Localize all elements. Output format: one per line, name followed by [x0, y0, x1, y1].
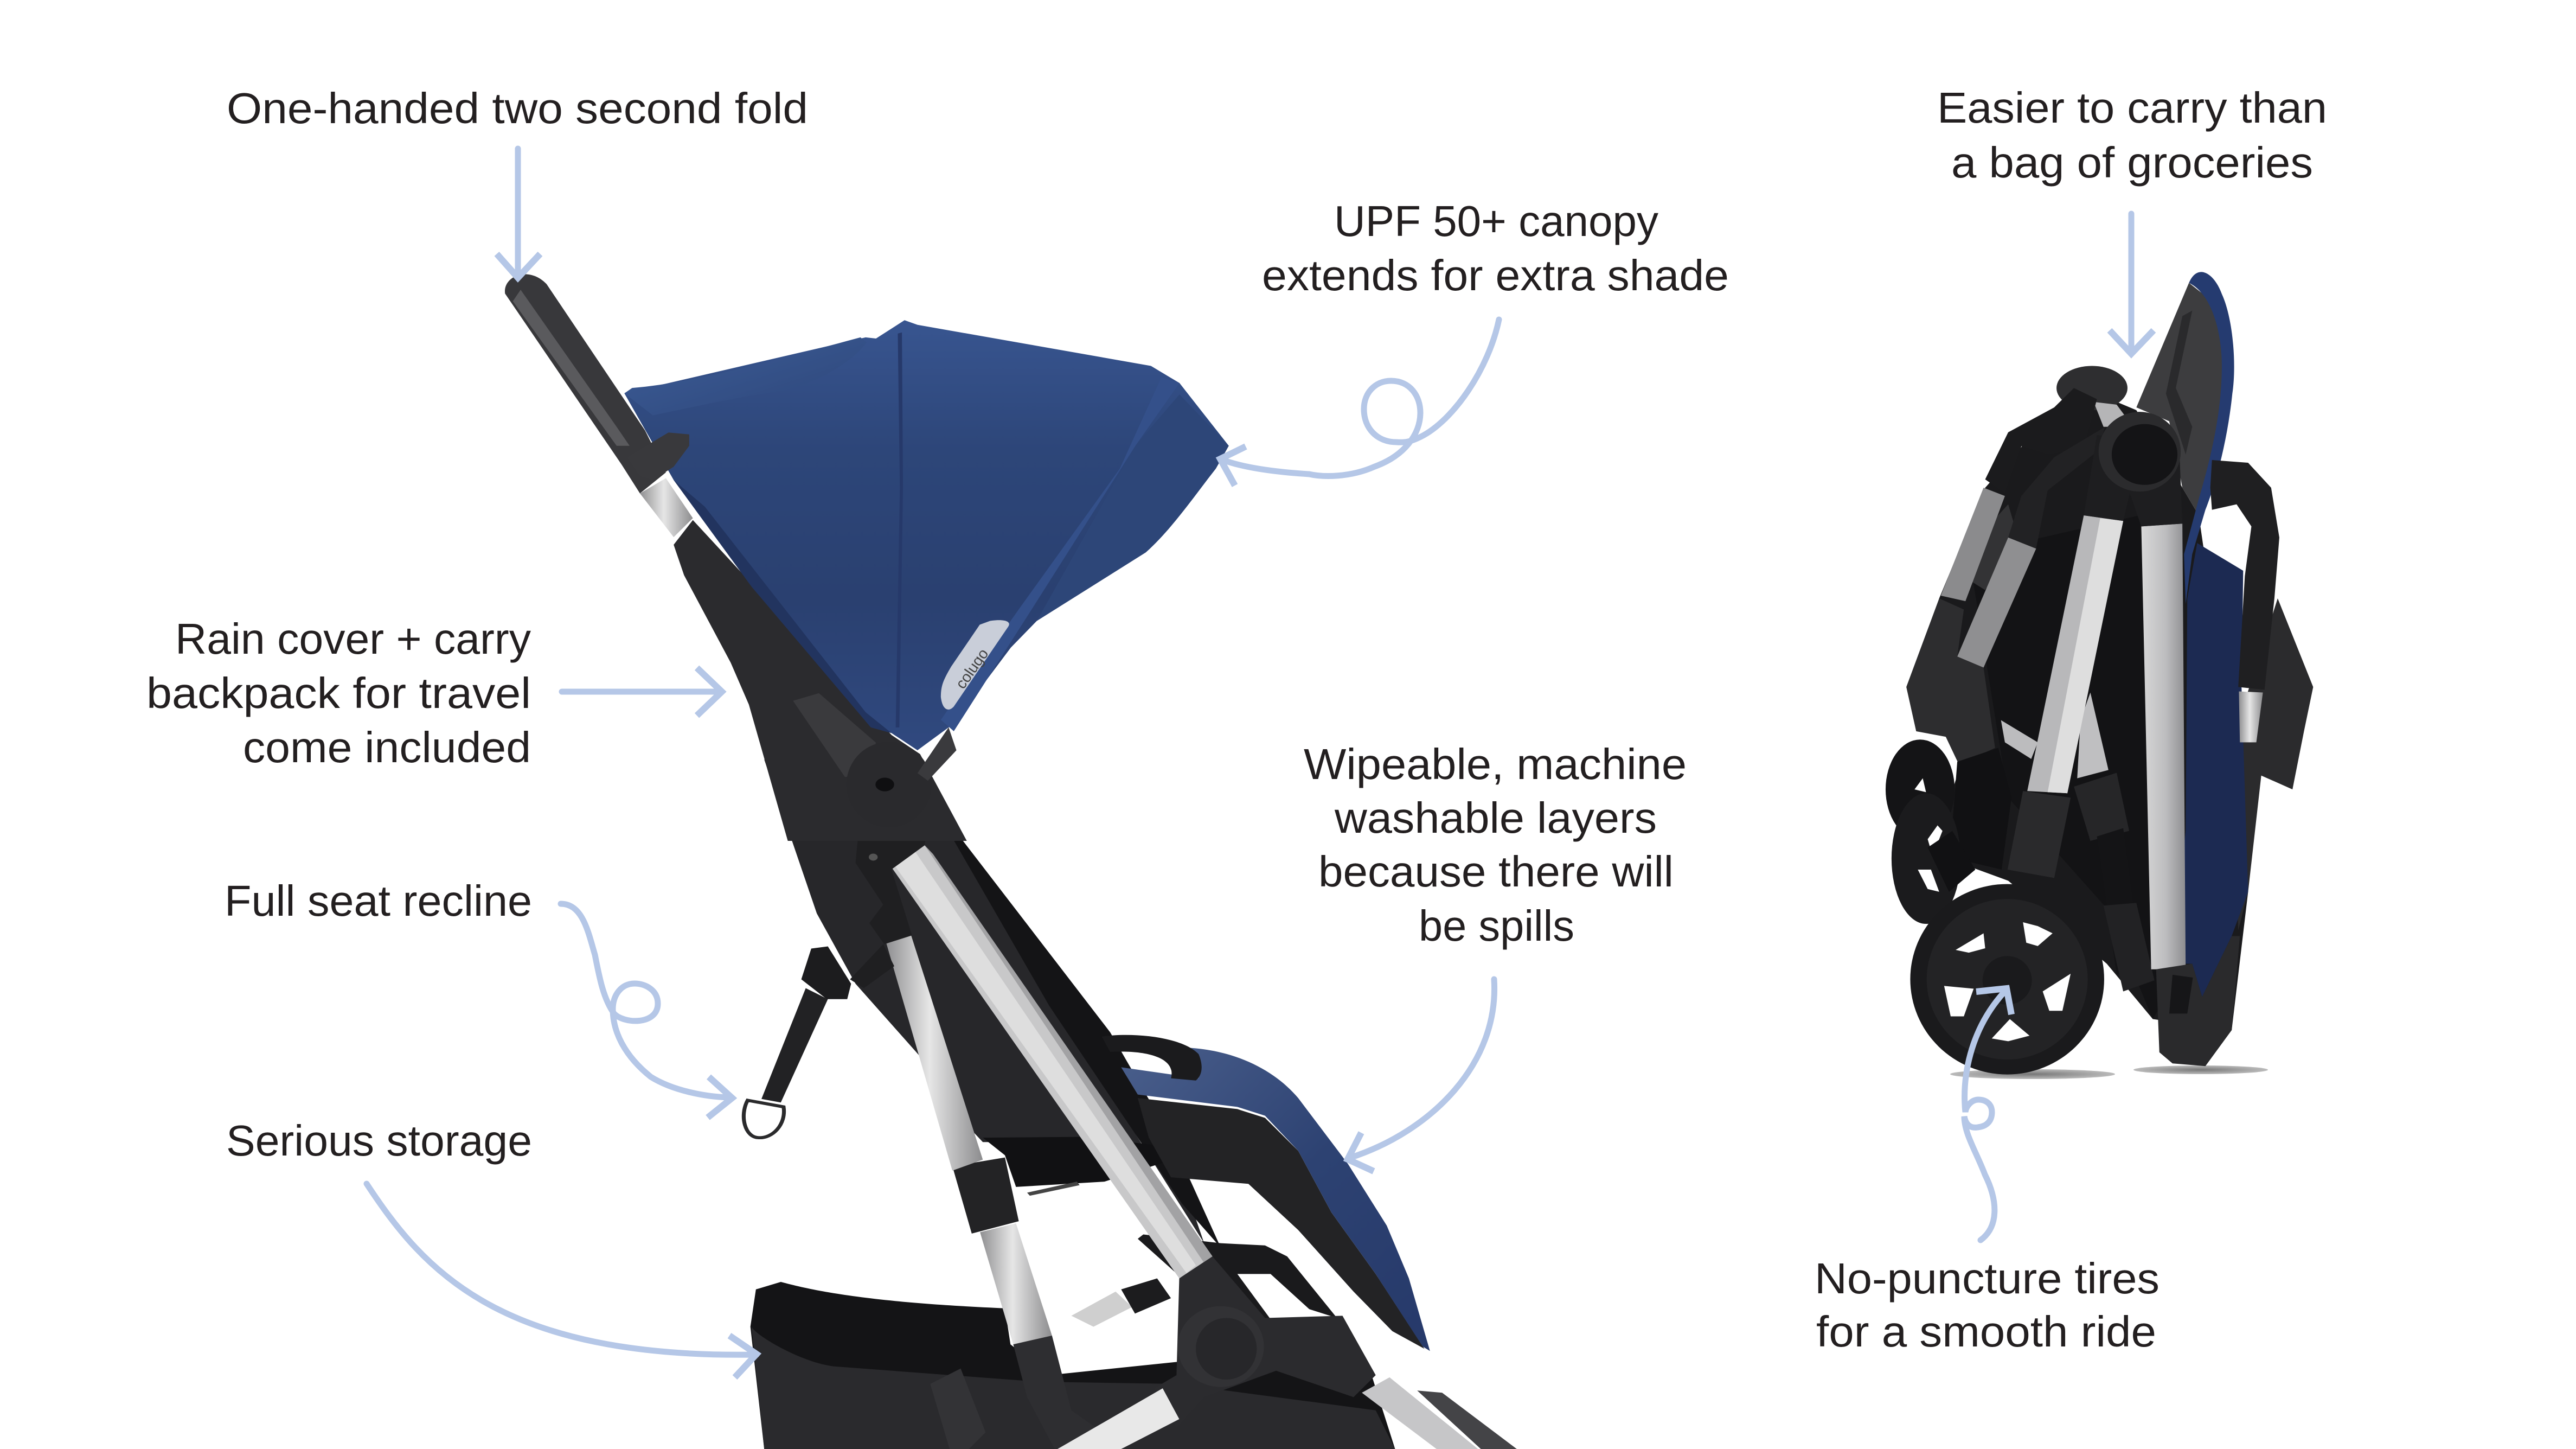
- rear leg clamp: [952, 1158, 1019, 1234]
- dark backing silhouette: [1933, 394, 2248, 1030]
- basket: [751, 1282, 1395, 1449]
- aluminium collar: [640, 478, 693, 537]
- rear leg upper tube: [886, 935, 983, 1171]
- canopy strap: [941, 378, 1180, 731]
- upper joint block: [856, 826, 927, 944]
- front wheel: [1910, 884, 2104, 1075]
- armrest: [1102, 1035, 1202, 1081]
- label: no-puncture tires: No-puncture tires: [1815, 1254, 2160, 1303]
- canopy and handle: [505, 274, 1229, 841]
- left grip: [1985, 388, 2097, 493]
- silver link: [2001, 720, 2038, 759]
- canopy clamp: [627, 432, 689, 480]
- folded frame parts: [1886, 272, 2313, 1075]
- left hull: [1906, 598, 1995, 764]
- main stroller side view: [505, 274, 1517, 1449]
- grey seat fabric: [2136, 283, 2228, 515]
- central dark mass: [1969, 515, 2186, 1019]
- grey seat pad: [1970, 505, 2018, 590]
- label: full seat recline: Full seat recline: [225, 877, 532, 925]
- fabric stripes: [2166, 310, 2192, 455]
- diagonal tube: [2027, 515, 2123, 793]
- top hub cap: [2099, 412, 2181, 491]
- label: no-puncture tires: [1815, 1254, 2160, 1356]
- label: rain cover: backpack for travel: [146, 669, 531, 717]
- seat back and black frame, lower section: [744, 759, 1517, 1449]
- canopy bracket: [918, 727, 957, 781]
- label: wipeable layers: because there will: [1318, 847, 1674, 896]
- rear wheel: [1886, 739, 1955, 839]
- label: wipeable layers: Wipeable, machine: [1304, 740, 1687, 788]
- handle grip: [505, 274, 666, 493]
- seat back upper frame: [674, 520, 967, 841]
- arrow: canopy with loop: [1220, 320, 1499, 486]
- label: rain cover: Rain cover + carry: [175, 615, 531, 663]
- arrow: carry weight: [2110, 214, 2154, 354]
- bottom right unit: [2156, 936, 2240, 1066]
- label: UPF canopy: UPF 50+ canopy: [1334, 197, 1658, 245]
- label: wipeable layers: be spills: [1419, 902, 1574, 950]
- canopy extension panel: [1037, 394, 1229, 621]
- label: wipeable layers: washable layers: [1334, 794, 1657, 842]
- label: one-handed two second fold: One-handed two second fold: [227, 84, 808, 132]
- main aluminium tube: [892, 845, 1213, 1279]
- folded navy fabric: [2173, 543, 2248, 997]
- label: UPF canopy: [1262, 197, 1729, 299]
- under seat structure: [983, 1137, 1165, 1187]
- arrow: one-handed fold: [497, 149, 540, 278]
- seat cushion navy: [1121, 1048, 1430, 1351]
- right handle: [2210, 460, 2279, 690]
- lower diagonal clamp: [2008, 791, 2071, 878]
- strap buckle: [802, 947, 851, 999]
- canopy silhouette: [624, 320, 1229, 750]
- vertical tube: [2141, 524, 2186, 969]
- footrest black underside: [1138, 1098, 1425, 1349]
- brand tag: [941, 620, 1009, 710]
- top hub body: [2084, 435, 2182, 526]
- arrow: washable layers: [1348, 979, 1495, 1171]
- left tubes: [1941, 488, 2005, 601]
- navy hood edge: [2184, 272, 2234, 604]
- back tube and clamp: [2077, 693, 2109, 778]
- canopy rear flap: [624, 337, 867, 416]
- rear frame loop: [1138, 1234, 1337, 1327]
- arrow: storage: [367, 1184, 757, 1377]
- label: easier to carry: a bag of groceries: [1951, 138, 2313, 187]
- handle highlight: [513, 290, 630, 446]
- arrow: rain cover: [562, 668, 722, 716]
- seat pivot: [847, 742, 932, 827]
- brand label: colugo: [952, 646, 992, 692]
- label: UPF canopy: extends for extra shade: [1262, 251, 1729, 299]
- middle wheel: [1892, 793, 1960, 924]
- arrow: tires with loop: [1964, 988, 2011, 1240]
- lower canopy inner edge: [674, 480, 892, 733]
- lower hub cap: [1177, 1306, 1264, 1387]
- label: easier to carry: Easier to carry than: [1937, 84, 2327, 132]
- rear leg lower tube: [980, 1223, 1052, 1344]
- D ring: [744, 1100, 784, 1138]
- label: wipeable layers: [1304, 740, 1687, 950]
- label: rain cover: come included: [243, 723, 531, 771]
- ground shadows: [1950, 1065, 2268, 1079]
- label: serious storage: Serious storage: [226, 1116, 532, 1165]
- canopy seam: [896, 333, 903, 727]
- folded stroller: [1886, 272, 2313, 1079]
- rear fabric: [2232, 598, 2313, 930]
- lower hub: [1155, 1256, 1376, 1428]
- label: rain cover: [146, 615, 531, 771]
- back disk: [2056, 366, 2128, 410]
- hanging strap: [761, 988, 828, 1102]
- arrow: seat recline with loop: [561, 904, 732, 1118]
- front tubes: [1058, 1388, 1179, 1449]
- label: easier to carry: [1937, 84, 2327, 187]
- label: no-puncture tires: for a smooth ride: [1816, 1307, 2156, 1356]
